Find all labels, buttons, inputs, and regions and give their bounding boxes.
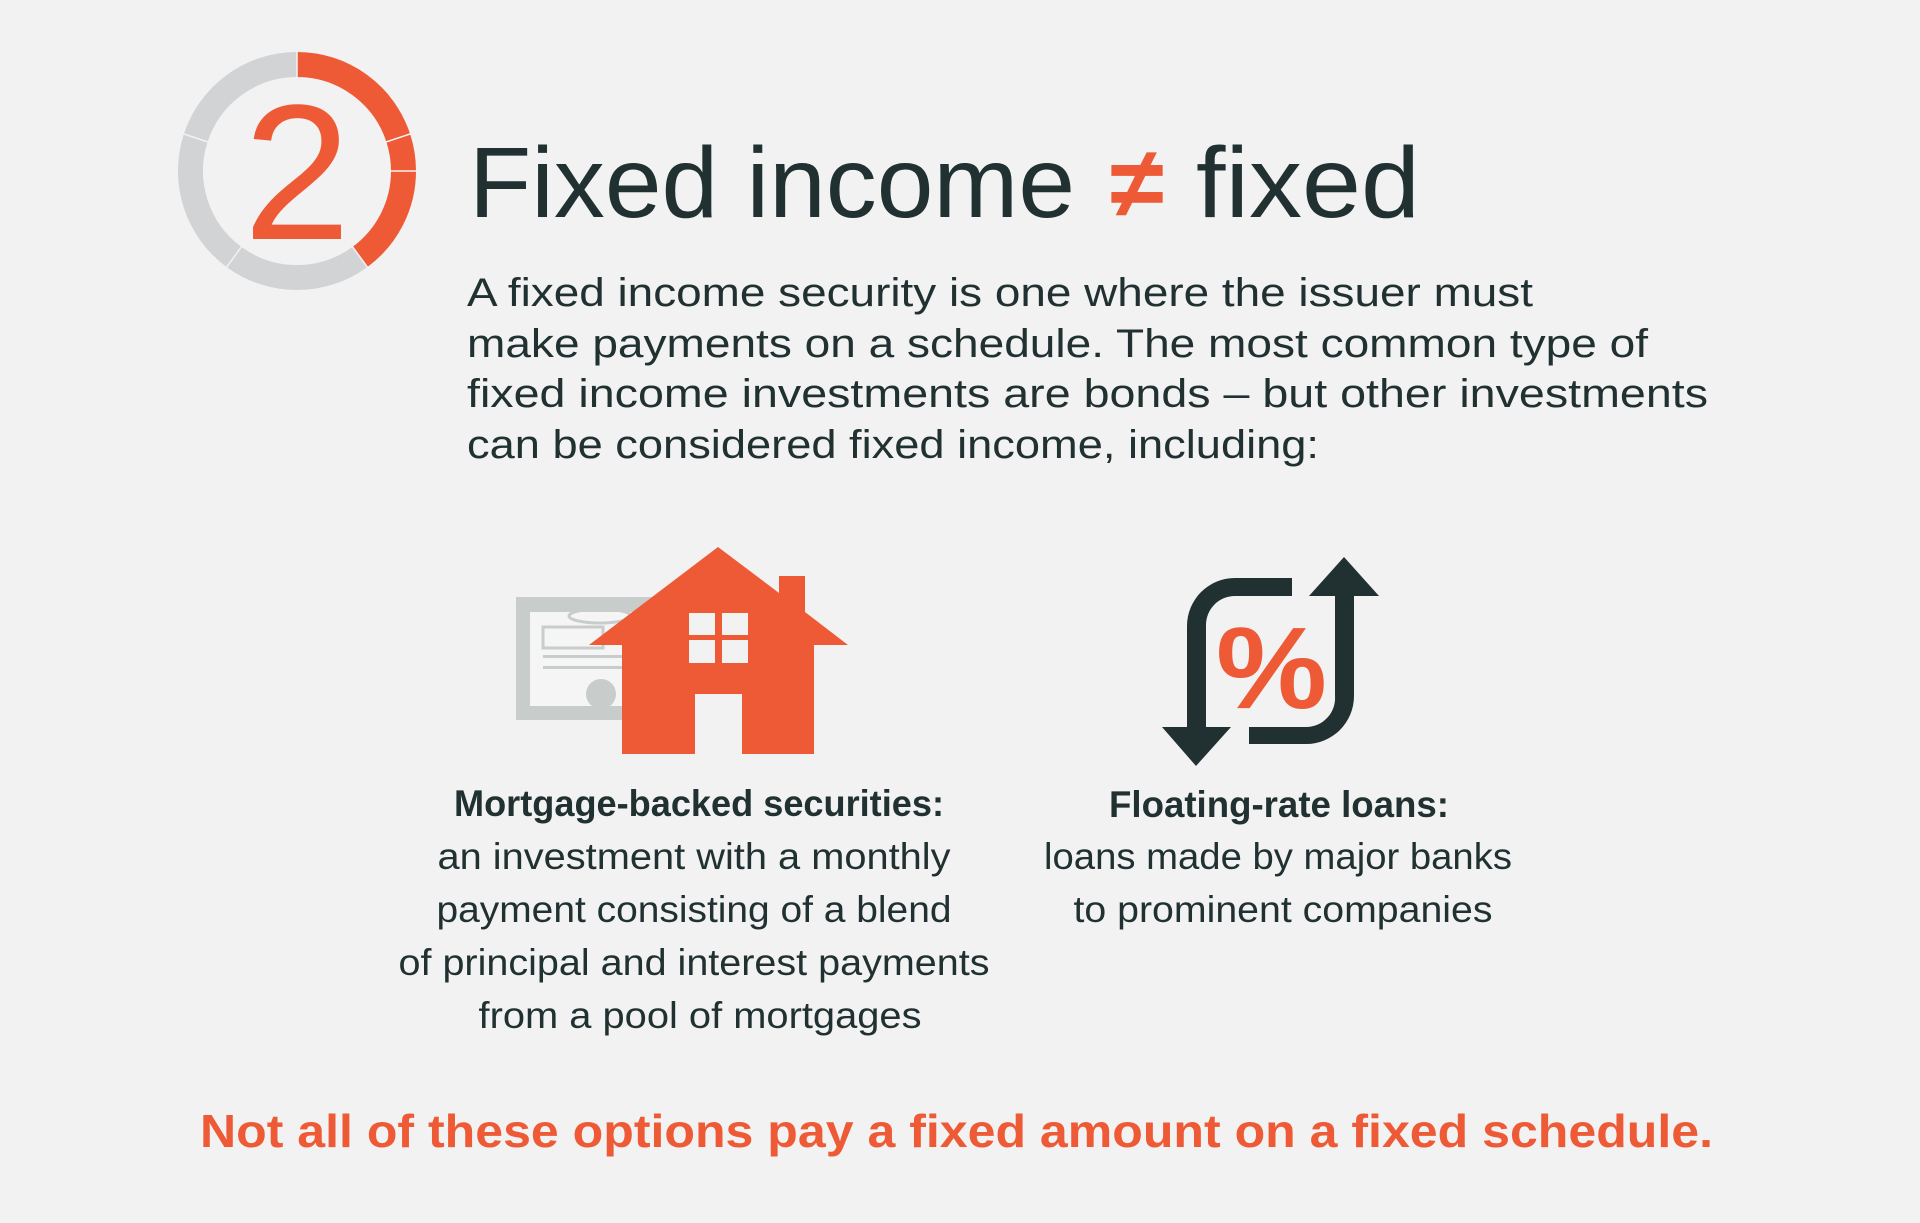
title: Fixed income xyxy=(469,127,1075,239)
caption: floating-rate loans: loans made by major banks xyxy=(1044,836,1512,877)
intro paragraph: can be considered fixed income, including: xyxy=(467,423,1319,467)
caption: mortgage-backed securities: from a pool of mortgages xyxy=(478,995,922,1036)
title: ≠ xyxy=(1110,127,1164,239)
icon: floating rate arrows with percent xyxy=(1162,557,1379,766)
title xyxy=(469,127,1420,239)
certificate xyxy=(516,597,656,720)
caption: floating-rate loans: Floating-rate loans: xyxy=(1109,784,1449,825)
caption: mortgage-backed securities: Mortgage-backed securities: xyxy=(454,783,944,824)
caption: mortgage-backed securities: an investment with a monthly xyxy=(438,836,951,877)
icon: house with mortgage certificate xyxy=(516,547,848,754)
callout: bottom statement: Not all of these options pay a fixed amount on a fixed schedule. xyxy=(200,1105,1713,1157)
caption: mortgage-backed securities: of principal and interest payments xyxy=(398,942,990,983)
intro paragraph: A fixed income security is one where the issuer must xyxy=(467,271,1533,315)
intro paragraph xyxy=(467,271,1708,467)
caption: floating-rate loans: to prominent companies xyxy=(1074,889,1492,930)
icon: numbered ring xyxy=(181,50,419,280)
caption: mortgage-backed securities xyxy=(398,783,990,1036)
title: fixed xyxy=(1196,127,1420,239)
caption: floating-rate loans xyxy=(1044,784,1512,930)
caption: mortgage-backed securities: payment consisting of a blend xyxy=(436,889,952,930)
icon: floating rate arrows with percent: % xyxy=(1216,603,1327,733)
intro paragraph: fixed income investments are bonds – but other investments xyxy=(467,372,1708,416)
number 2: 2 xyxy=(243,64,351,280)
house xyxy=(589,547,848,754)
intro paragraph: make payments on a schedule. The most common type of xyxy=(467,322,1649,366)
